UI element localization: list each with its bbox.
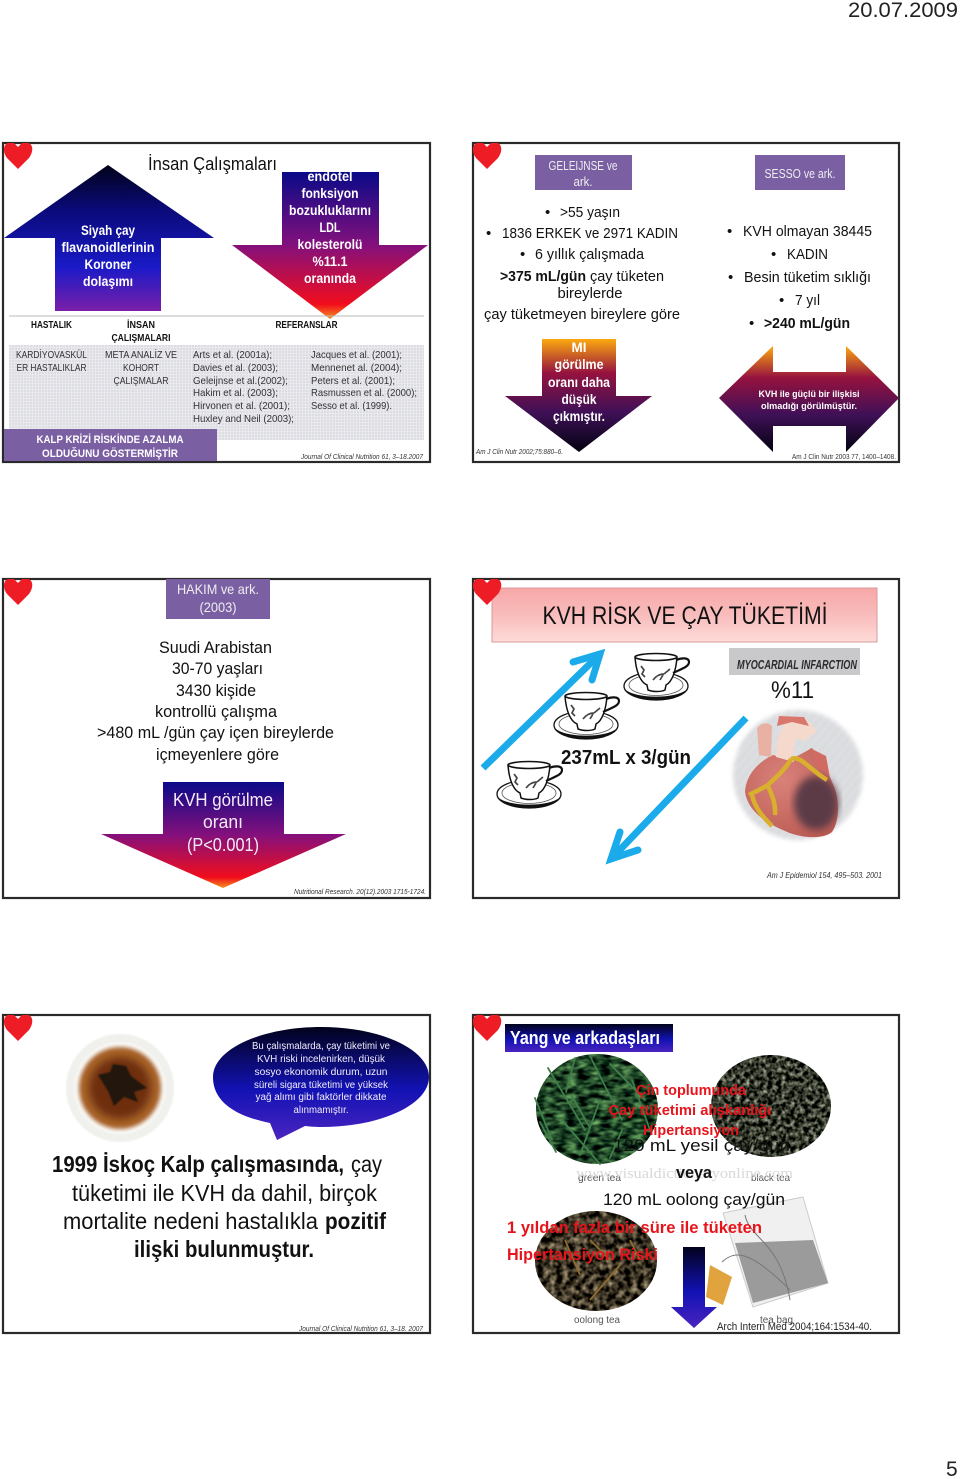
illustration: heart with infarct bbox=[733, 710, 863, 840]
down arrow: endothelial dysfunction and LDL: kolesterolü bbox=[298, 236, 362, 252]
heading: İnsan Çalışmaları bbox=[148, 153, 277, 174]
citation: Geleijnse: Am J Clin Nutr 2002;75:880–6. bbox=[475, 449, 563, 456]
study details: >480 mL /gün çay içen bireylerde bbox=[97, 724, 334, 742]
label: Sesso: SESSO ve ark. bbox=[764, 166, 836, 181]
main statement: 1999 İskoç Kalp çalışmasında, bbox=[52, 1151, 344, 1177]
up arrow: black tea flavanoids: Siyah çay bbox=[81, 222, 135, 238]
column: disease: ER HASTALIKLAR bbox=[16, 362, 87, 374]
table header: ÇALIŞMALARI bbox=[112, 333, 171, 344]
list: Geleijnse study details: >55 yaşın bbox=[560, 204, 620, 221]
column: references right: Peters et al. (2001); bbox=[311, 375, 395, 387]
study details bbox=[97, 639, 334, 764]
speech bubble: confounders bbox=[213, 1027, 429, 1140]
down arrow: CVD rate: (P<0.001) bbox=[187, 835, 259, 855]
column: disease bbox=[16, 348, 87, 374]
list: Sesso study details: • bbox=[749, 315, 754, 332]
up arrow: black tea flavanoids: dolaşımı bbox=[83, 273, 133, 289]
panel: Geleijnse and Sesso bbox=[473, 143, 899, 462]
panel background and border bbox=[473, 143, 899, 462]
red text: Chinese population: Çin toplumunda bbox=[636, 1083, 747, 1099]
panel background and border bbox=[473, 1015, 899, 1333]
risk percentage: %11 bbox=[771, 677, 814, 704]
label: Geleijnse bbox=[535, 155, 632, 190]
table header bbox=[31, 318, 338, 344]
speech bubble: confounders: süreli sigara tüketimi ve yüksek bbox=[254, 1080, 389, 1091]
column: references left: Geleijnse et al.(2002); bbox=[193, 375, 288, 387]
down arrow: MI rate lower: oranı daha bbox=[548, 374, 610, 390]
title banner bbox=[492, 588, 877, 642]
icon: tea cup 1 bbox=[497, 762, 562, 808]
down arrow: MI rate lower: MI bbox=[572, 339, 586, 355]
down arrow: endothelial dysfunction and LDL: fonksiyon bbox=[302, 185, 358, 201]
dose text: 120 mL oolong çay/gün bbox=[603, 1190, 785, 1209]
speech bubble: confounders: KVH riski incelenirken, düşük bbox=[257, 1054, 386, 1065]
main statement: pozitif bbox=[325, 1208, 386, 1234]
label: myocardial infarction bbox=[729, 648, 860, 675]
citation: Nutritional Research. 20(12).2003 1715-1724. bbox=[294, 889, 426, 896]
label: Sesso bbox=[755, 155, 845, 190]
column: human studies: META ANALİZ VE bbox=[105, 348, 177, 361]
list: Geleijnse study details: 1836 ERKEK ve 2971 KADIN bbox=[502, 225, 678, 242]
column: human studies bbox=[105, 348, 177, 387]
panel: İnsan Çalışmaları bbox=[3, 143, 430, 462]
down arrow: endothelial dysfunction and LDL bbox=[232, 168, 428, 319]
up arrow: black tea flavanoids bbox=[4, 165, 214, 311]
double arrow: no strong relation: KVH ile güçlü bir ilişkisi bbox=[758, 389, 860, 400]
icon: heart bbox=[4, 143, 32, 169]
main statement: mortalite nedeni hastalıkla bbox=[63, 1208, 318, 1234]
up arrow: black tea flavanoids: Koroner bbox=[84, 256, 132, 272]
list: Geleijnse study details: • bbox=[486, 225, 491, 242]
dose text: veya bbox=[676, 1163, 713, 1182]
list: Geleijnse study details: >375 mL/gün bbox=[500, 268, 586, 285]
list: Sesso study details: • bbox=[771, 246, 776, 263]
red text: Chinese population bbox=[608, 1083, 772, 1139]
icon: heart bbox=[4, 579, 32, 605]
arrow: tea consumption up bbox=[483, 654, 600, 768]
icon: heart bbox=[473, 143, 501, 169]
dose text bbox=[603, 1136, 790, 1209]
caption: black tea: black tea bbox=[751, 1173, 790, 1184]
dose text: 120 mL yesil çay/gün bbox=[613, 1136, 790, 1155]
study details: 30-70 yaşları bbox=[172, 660, 263, 678]
list: Sesso study details: 7 yıl bbox=[795, 292, 820, 309]
title banner: Yang ve arkadaşları bbox=[510, 1028, 660, 1048]
speech bubble: confounders: yağ alımı gibi faktörler dikkate bbox=[256, 1092, 387, 1103]
up arrow: black tea flavanoids: flavanoidlerinin bbox=[62, 239, 154, 255]
red text: Chinese population: Çay tüketimi alışkanlığı bbox=[608, 1103, 772, 1119]
table header: REFERANSLAR bbox=[276, 320, 338, 331]
column: references right: Jacques et al. (2001); bbox=[311, 349, 402, 361]
panel: Hakim bbox=[3, 579, 430, 898]
list: Sesso study details: >240 mL/gün bbox=[764, 315, 850, 332]
down arrow: endothelial dysfunction and LDL: LDL bbox=[320, 219, 341, 235]
speech bubble: confounders: sosyo ekonomik durum, uzun bbox=[254, 1067, 388, 1078]
red text: Chinese population: Hipertansiyon bbox=[643, 1123, 739, 1139]
panel background and border bbox=[3, 143, 430, 462]
label: Geleijnse: ark. bbox=[574, 174, 592, 189]
down arrow: endothelial dysfunction and LDL: endotel bbox=[308, 168, 352, 184]
list: Sesso study details: Besin tüketim sıklığı bbox=[744, 269, 871, 286]
dose label: 237mL x 3/gün bbox=[561, 747, 691, 769]
watermark: www.visualdictionaryonline.com bbox=[576, 1166, 793, 1182]
column: references left: Hakim et al. (2003); bbox=[193, 387, 278, 399]
illustration: green tea bbox=[535, 1054, 658, 1164]
callout: heart attack risk: KALP KRİZİ RİSKİNDE AZALMA bbox=[36, 433, 184, 446]
down arrow: CVD rate: oranı bbox=[203, 812, 243, 832]
column: references left: Arts et al. (2001a); bbox=[193, 349, 272, 361]
down arrow: endothelial dysfunction and LDL: %11.1 bbox=[312, 253, 348, 269]
column: references left bbox=[193, 349, 294, 425]
callout: heart attack risk: OLDUĞUNU GÖSTERMİŞTİR bbox=[42, 447, 178, 460]
citation: Sesso: Am J Clin Nutr 2003 77, 1400–1408. bbox=[792, 454, 896, 461]
panel background and border bbox=[473, 579, 899, 898]
caption: green tea: green tea bbox=[578, 1173, 621, 1184]
down arrow: MI rate lower: görülme bbox=[554, 356, 604, 372]
list: Geleijnse study details: çay tüketmeyen bireylere göre bbox=[484, 306, 680, 323]
icon: heart bbox=[473, 579, 501, 605]
icon: heart bbox=[473, 1015, 501, 1041]
list: Geleijnse study details: • bbox=[520, 246, 525, 263]
illustration: tea bag bbox=[706, 1197, 828, 1307]
table header: HASTALIK bbox=[31, 320, 73, 331]
red text: hypertension risk: 1 yıldan fazla bir süre ile tüketen bbox=[507, 1218, 762, 1237]
table header: İNSAN bbox=[127, 318, 155, 331]
list: Sesso study details: • bbox=[728, 269, 733, 286]
list: Geleijnse study details: • bbox=[545, 204, 550, 221]
red text: hypertension risk bbox=[507, 1218, 762, 1264]
down arrow: MI rate lower bbox=[505, 339, 652, 452]
illustration: oolong tea bbox=[535, 1211, 657, 1311]
main statement bbox=[52, 1151, 386, 1262]
label: myocardial infarction: MYOCARDIAL INFARCTION bbox=[737, 657, 857, 672]
column: references left: Hirvonen et al. (2001); bbox=[193, 400, 290, 412]
down arrow: MI rate lower: düşük bbox=[562, 391, 597, 407]
list: Sesso study details: KVH olmayan 38445 bbox=[743, 223, 872, 240]
icon: tea cup 3 bbox=[624, 654, 689, 700]
speech bubble: confounders: Bu çalışmalarda, çay tüketimi ve bbox=[252, 1041, 390, 1052]
column: references right bbox=[311, 349, 417, 412]
label: Hakim: (2003) bbox=[200, 599, 236, 615]
column: human studies: ÇALIŞMALAR bbox=[114, 375, 169, 387]
study details: içmeyenlere göre bbox=[156, 746, 279, 764]
citation: Arch Intern Med 2004;164:1534-40. bbox=[717, 1321, 872, 1333]
caption: tea bag: tea bag bbox=[760, 1315, 793, 1326]
callout: heart attack risk bbox=[4, 429, 217, 461]
title banner: KVH RİSK VE ÇAY TÜKETİMİ bbox=[542, 601, 828, 630]
panel: 1999 Scottish Heart study bbox=[3, 1015, 430, 1333]
list: Sesso study details: • bbox=[727, 223, 732, 240]
column: references right: Sesso et al. (1999). bbox=[311, 400, 392, 412]
illustration: black tea bbox=[711, 1055, 831, 1157]
table bbox=[9, 316, 424, 440]
icon: tea cup 2 bbox=[554, 692, 619, 739]
title banner bbox=[505, 1024, 673, 1052]
caption: oolong tea: oolong tea bbox=[574, 1315, 620, 1326]
column: references right: Mennenet al. (2004); bbox=[311, 362, 402, 374]
main statement: ilişki bulunmuştur. bbox=[134, 1236, 314, 1262]
down arrow: endothelial dysfunction and LDL: oranında bbox=[304, 270, 356, 286]
main statement: çay bbox=[351, 1151, 382, 1177]
column: references left: Davies et al. (2003); bbox=[193, 362, 278, 374]
down arrow: CVD rate bbox=[101, 782, 346, 888]
list: Sesso study details bbox=[727, 223, 872, 332]
column: disease: KARDİYOVASKÜL bbox=[16, 348, 87, 361]
list: Geleijnse study details: çay tüketen bbox=[590, 268, 664, 285]
citation: Journal Of Clinical Nutrition 61, 3–18. 2007 bbox=[298, 1326, 424, 1333]
study details: kontrollü çalışma bbox=[155, 703, 278, 721]
study details: Suudi Arabistan bbox=[159, 639, 272, 657]
label: Hakim bbox=[166, 579, 270, 619]
down arrow: endothelial dysfunction and LDL: bozukluklarını bbox=[289, 202, 371, 218]
double arrow: no strong relation: olmadığı görülmüştür. bbox=[761, 401, 857, 412]
down arrow: MI rate lower: çıkmıştır. bbox=[553, 408, 605, 424]
down arrow: CVD rate: KVH görülme bbox=[173, 790, 273, 810]
label: Geleijnse: GELEIJNSE ve bbox=[548, 158, 618, 173]
speech bubble: confounders: alınmamıştır. bbox=[294, 1105, 348, 1116]
main statement: tüketimi ile KVH da dahil, birçok bbox=[72, 1180, 377, 1206]
label: Hakim: HAKIM ve ark. bbox=[177, 581, 259, 597]
icon: heart bbox=[4, 1015, 32, 1041]
column: human studies: KOHORT bbox=[123, 362, 159, 374]
list: Geleijnse study details: bireylerde bbox=[558, 285, 622, 302]
citation: Journal Of Clinical Nutrition 61, 3–18.2007 bbox=[300, 454, 424, 461]
illustration: cup of tea from above bbox=[66, 1034, 174, 1142]
study details: 3430 kişide bbox=[176, 682, 256, 700]
column: references right: Rasmussen et al. (2000); bbox=[311, 387, 417, 399]
list: Sesso study details: KADIN bbox=[787, 246, 828, 263]
down arrow: risk decrease bbox=[671, 1247, 717, 1328]
panel: Yang and colleagues bbox=[473, 1015, 899, 1333]
red text: hypertension risk: Hipertansiyon Riski bbox=[507, 1245, 658, 1264]
list: Geleijnse study details bbox=[484, 204, 680, 323]
column: references left: Huxley and Neil (2003); bbox=[193, 413, 294, 425]
list: Sesso study details: • bbox=[779, 292, 784, 309]
panel background and border bbox=[3, 579, 430, 898]
panel: KVH risk and tea bbox=[473, 579, 899, 898]
panel background and border bbox=[3, 1015, 430, 1333]
double arrow: no strong relation bbox=[719, 346, 899, 452]
citation: Am J Epidemiol 154, 495–503. 2001 bbox=[766, 871, 882, 880]
list: Geleijnse study details: 6 yıllık çalışmada bbox=[535, 246, 645, 263]
arrow: risk down bbox=[611, 718, 746, 859]
